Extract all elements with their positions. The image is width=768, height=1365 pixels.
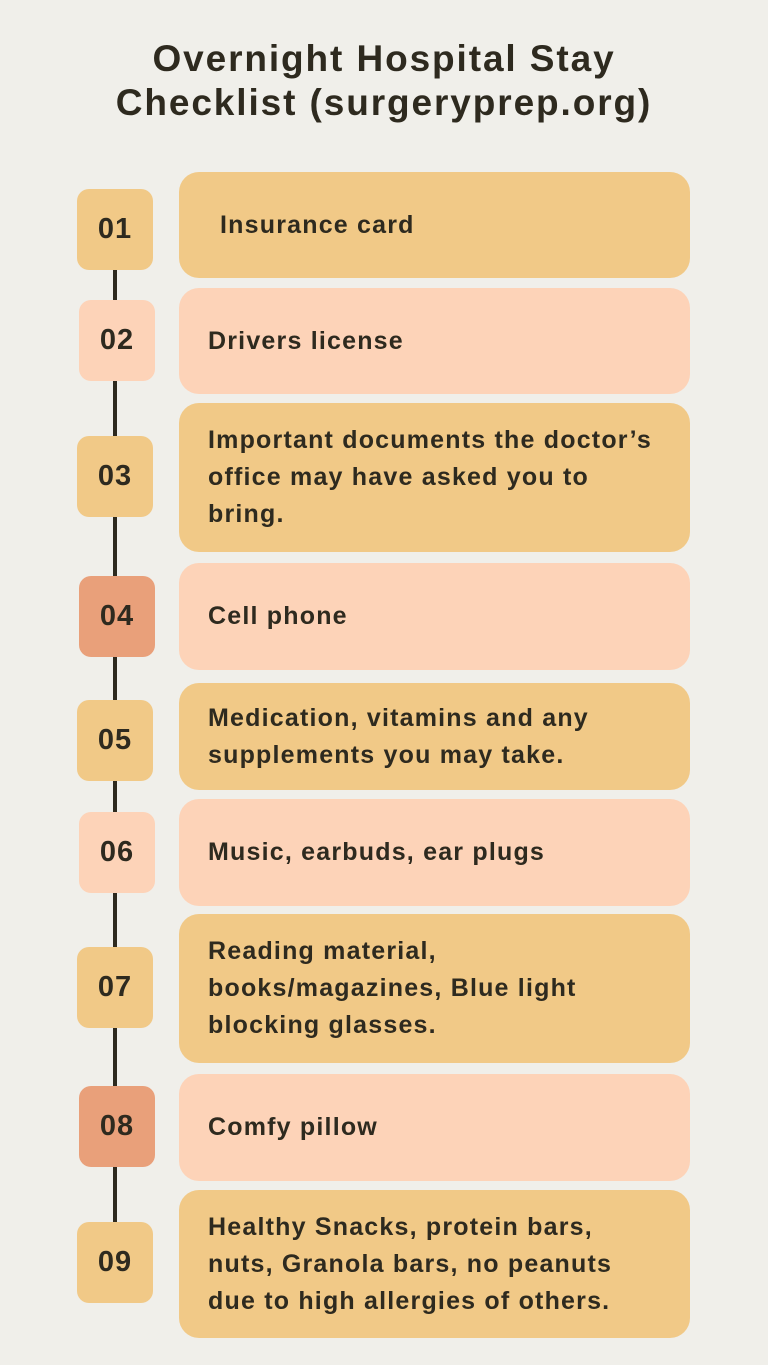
item 8: Comfy pillow [208,1113,378,1141]
title: Checklist (surgeryprep.org) [116,82,652,123]
number 01 [77,189,153,270]
number 04 [79,576,155,657]
item 9 [179,1190,690,1338]
item 7: books/magazines, Blue light [208,974,577,1002]
number 07: 07 [98,971,132,1003]
number 08 [79,1086,155,1167]
item 5: Medication, vitamins and any [208,704,589,732]
item 9: nuts, Granola bars, no peanuts [208,1250,612,1278]
title: Overnight Hospital Stay [152,38,616,79]
title [116,38,652,123]
item 7: blocking glasses. [208,1011,437,1039]
number 08: 08 [100,1110,134,1142]
item 6: Music, earbuds, ear plugs [208,838,545,866]
item 9: Healthy Snacks, protein bars, [208,1212,593,1240]
item 3: office may have asked you to [208,463,589,491]
item 3 [179,403,690,552]
item 4: Cell phone [208,602,348,630]
number 03: 03 [98,460,132,492]
item 2: Drivers license [208,326,404,354]
item 3: Important documents the doctor’s [208,426,652,454]
item 8 [179,1074,690,1181]
number 02: 02 [100,324,134,356]
item 2 [179,288,690,394]
item 7 [179,914,690,1063]
item 4 [179,563,690,670]
item 5: supplements you may take. [208,740,565,768]
number 01: 01 [98,213,132,245]
number 05: 05 [98,724,132,756]
number 04: 04 [100,600,134,632]
number 07 [77,947,153,1028]
number 09: 09 [98,1246,132,1278]
number 06 [79,812,155,893]
item 6 [179,799,690,906]
item 1: Insurance card [220,210,415,238]
item 5 [179,683,690,790]
number 02 [79,300,155,381]
item 3: bring. [208,500,285,528]
number 06: 06 [100,836,134,868]
item 9: due to high allergies of others. [208,1286,610,1314]
item 1 [179,172,690,278]
item 7: Reading material, [208,937,437,965]
number 09 [77,1222,153,1303]
number 05 [77,700,153,781]
number 03 [77,436,153,517]
